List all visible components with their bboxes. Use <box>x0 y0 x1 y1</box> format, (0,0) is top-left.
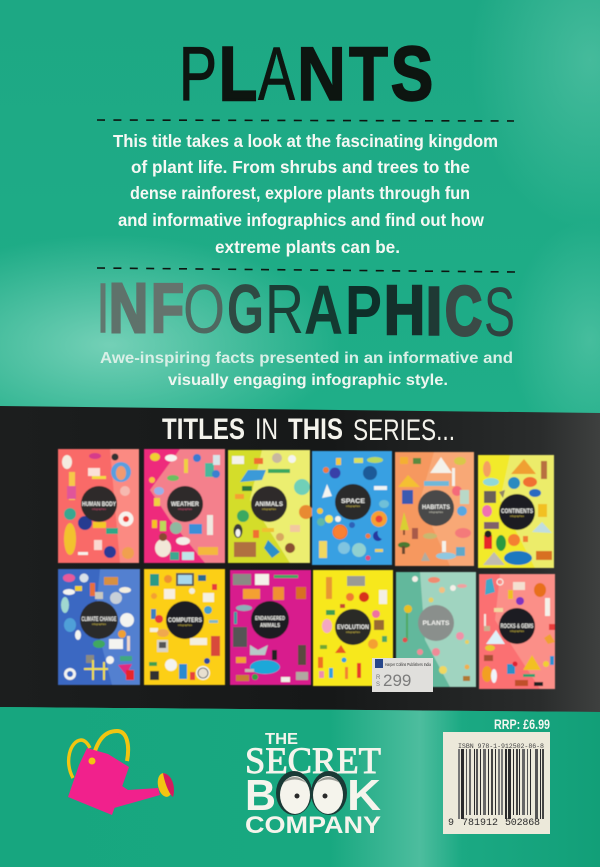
cover title circle: CLIMATE CHANGE <box>82 616 117 623</box>
price sticker: Harper Collins Publishers India <box>385 662 431 667</box>
tagline text <box>100 350 513 389</box>
icon: pink watering can <box>68 731 174 815</box>
title: PLANTS: S <box>391 32 433 117</box>
panel: black series band <box>0 406 600 712</box>
heading: INFOGRAPHICS: O <box>183 270 225 348</box>
description text block: and informative infographics and find out how <box>118 210 484 230</box>
price sticker <box>372 658 433 692</box>
price sticker: R <box>376 675 381 681</box>
heading: INFOGRAPHICS: A <box>304 271 343 349</box>
cover title circle <box>251 601 289 639</box>
barcode panel: 502868 <box>505 818 540 829</box>
cover title circle <box>418 490 454 526</box>
cover title circle: WEATHER <box>171 501 199 508</box>
cover title circle <box>335 609 371 645</box>
heading: INFOGRAPHICS: I <box>425 272 443 350</box>
cover title circle: infographics <box>346 504 361 508</box>
cover: Space <box>312 451 392 565</box>
heading: INFOGRAPHICS: N <box>109 269 148 347</box>
cover: Climate Change <box>58 569 140 685</box>
cover: Animals <box>228 450 313 563</box>
heading: titles in this series: TITLES <box>162 413 245 446</box>
description text block: dense rainforest, explore plants through fun <box>130 183 470 203</box>
title: PLANTS <box>179 32 433 117</box>
barcode panel: 781912 <box>462 818 498 829</box>
cover title circle: ANIMALS <box>255 501 284 508</box>
cover grid <box>58 449 555 689</box>
cover title circle <box>166 601 204 639</box>
cover title circle: EVOLUTION <box>337 624 369 631</box>
heading: INFOGRAPHICS: P <box>345 271 382 349</box>
logo: The Secret Book Company: B <box>245 771 276 820</box>
cover title circle: ENDANGERED <box>255 616 285 622</box>
description text block: of plant life. From shrubs and trees to the <box>131 157 470 177</box>
cover: Continents <box>478 455 554 568</box>
cover title circle: ROCKS & GEMS <box>500 623 534 630</box>
barcode panel <box>443 732 550 834</box>
title: PLANTS: T <box>349 32 388 117</box>
cover: Endangered Animals <box>230 570 311 685</box>
cover title circle: HABITATS <box>422 504 451 511</box>
heading: titles in this series <box>162 413 455 447</box>
dashed divider bottom <box>97 268 515 272</box>
title: PLANTS: N <box>297 32 346 117</box>
cover title circle: COMPUTERS <box>168 617 203 624</box>
cover: Computers <box>144 569 225 685</box>
cover title circle: HUMAN BODY <box>82 501 117 508</box>
cover title circle: infographics <box>510 514 525 518</box>
heading: INFOGRAPHICS <box>97 269 515 351</box>
title: PLANTS: L <box>219 32 257 117</box>
tagline text: Awe-inspiring facts presented in an informative and <box>100 350 513 367</box>
heading: INFOGRAPHICS: H <box>384 271 425 349</box>
description text block: This title takes a look at the fascinating kingdom <box>113 131 498 151</box>
heading: INFOGRAPHICS: S <box>484 273 515 351</box>
cover title circle: ANIMALS <box>260 623 280 629</box>
footer green strip <box>0 707 600 867</box>
cover title circle <box>81 486 117 522</box>
cover: Habitats <box>395 452 474 566</box>
logo: The Secret Book Company: SECRET <box>245 741 381 782</box>
cover title circle <box>499 608 535 644</box>
heading: INFOGRAPHICS: R <box>265 270 304 348</box>
description text block: extreme plants can be. <box>215 237 400 257</box>
title: PLANTS: P <box>179 32 217 117</box>
cover: Evolution <box>313 570 393 686</box>
price sticker: 299 <box>383 671 411 690</box>
heading: titles in this series: SERIES... <box>353 414 455 447</box>
cover title circle <box>499 494 535 530</box>
logo: The Secret Book Company: COMPANY <box>245 812 381 839</box>
cover title circle <box>335 484 371 520</box>
logo: The Secret Book Company <box>245 731 381 839</box>
cover title circle: CONTINENTS <box>501 508 534 515</box>
tagline text: visually engaging infographic style. <box>168 372 448 389</box>
price sticker: S <box>376 682 380 688</box>
cover title circle: SPACE <box>341 498 366 505</box>
dashed divider top <box>97 120 514 121</box>
cover title circle: infographics <box>510 629 525 633</box>
cover title circle <box>251 486 287 522</box>
cover title circle <box>80 601 118 639</box>
cover: Human Body <box>58 449 139 563</box>
heading: INFOGRAPHICS: G <box>227 270 264 348</box>
cover title circle: infographics <box>178 507 193 511</box>
logo: The Secret Book Company: THE <box>265 731 298 748</box>
cover title circle: PLANTS <box>422 620 450 627</box>
barcode panel: 9 <box>448 818 454 829</box>
heading: titles in this series: IN <box>255 413 278 446</box>
heading: INFOGRAPHICS: F <box>151 269 184 347</box>
cover title circle: infographics <box>178 623 193 627</box>
logo: The Secret Book Company: K <box>347 771 381 820</box>
cover title circle: infographics <box>262 507 277 511</box>
title: PLANTS: A <box>258 32 295 117</box>
cover title circle: infographics <box>92 507 107 511</box>
barcode panel: ISBN 978-1-912502-86-8 <box>458 743 544 750</box>
description text block <box>113 131 498 257</box>
cover title circle: infographics <box>346 630 361 634</box>
heading: INFOGRAPHICS: C <box>445 272 482 350</box>
cover: Weather <box>144 449 225 563</box>
cover title circle: infographics <box>429 510 444 514</box>
cover: Rocks and Gems <box>479 574 555 689</box>
heading: INFOGRAPHICS: I <box>97 269 109 347</box>
cover title circle <box>167 486 203 522</box>
heading: titles in this series: THIS <box>288 413 343 446</box>
price: RRP: RRP: £6.99 <box>494 717 550 732</box>
cover: Plants <box>396 572 476 687</box>
cover title circle: infographics <box>92 622 107 626</box>
